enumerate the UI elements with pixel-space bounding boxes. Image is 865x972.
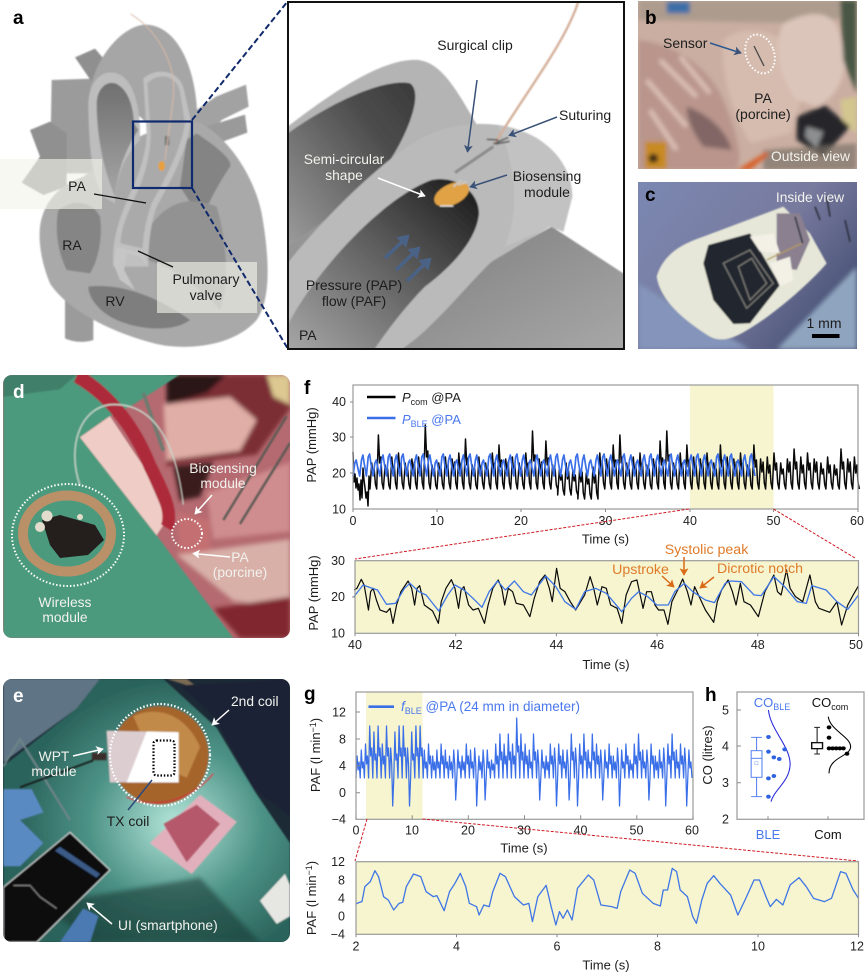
dotted outline xyxy=(12,484,124,586)
sensor line xyxy=(754,46,764,66)
label TX coil: TX coil xyxy=(107,813,149,829)
legend: @PA (24 mm in diameter) xyxy=(422,699,580,714)
label suturing: Suturing xyxy=(559,107,611,123)
panel letter f: f xyxy=(304,378,311,399)
y axis labels: 12 xyxy=(331,855,345,869)
x axis title: Time (s) xyxy=(582,657,630,672)
label PA porcine: (porcine) xyxy=(735,106,791,122)
BLE distribution xyxy=(751,710,790,802)
label CO com: CO xyxy=(812,695,831,710)
chart: PAF 0 to 60 s xyxy=(308,692,699,856)
chart: PAP 40 to 50 s xyxy=(306,542,863,672)
x axis labels xyxy=(348,638,863,652)
legend: commercial: @PA xyxy=(428,390,461,405)
zoom guide lines xyxy=(355,509,855,559)
y axis labels: 4 xyxy=(722,740,729,754)
annotation: upstroke: Upstroke xyxy=(612,562,669,578)
x axis labels: 2 xyxy=(353,940,360,954)
photo xyxy=(638,0,857,170)
x axis labels: 30 xyxy=(599,514,612,528)
blue trace xyxy=(356,868,859,925)
y axis labels: 0 xyxy=(339,786,346,800)
vessel rendering xyxy=(288,2,628,353)
x axis labels: 0 xyxy=(353,824,360,838)
panel e: surgical setup photo xyxy=(3,679,290,942)
label CO com: com xyxy=(831,702,848,712)
x axis labels xyxy=(353,940,864,954)
arrow to sensor xyxy=(710,43,741,53)
annotation: dicrotic notch xyxy=(700,561,803,588)
highlight band xyxy=(356,862,858,934)
label pressure and flow: Pressure (PAP) xyxy=(306,277,402,293)
label CO BLE: BLE xyxy=(773,702,790,712)
chart: PAF 2 to 12 s xyxy=(304,855,864,972)
label outside view: Outside view xyxy=(771,149,850,164)
arrow to biosensing module xyxy=(470,175,507,187)
x axis labels: 60 xyxy=(685,824,699,838)
components xyxy=(35,510,83,532)
commercial distribution xyxy=(812,717,851,773)
label inside view: Inside view xyxy=(776,190,844,205)
x axis title: Time (s) xyxy=(582,532,629,546)
panel letter g: g xyxy=(304,684,316,705)
legend: commercial: com xyxy=(411,397,428,407)
photo xyxy=(638,182,857,349)
y axis title: ) xyxy=(308,718,323,722)
y axis title: PAP (mmHg) xyxy=(306,555,321,631)
label biosensing module: module xyxy=(524,184,570,200)
annotation: systolic peak: Systolic peak xyxy=(665,542,749,558)
zoom box xyxy=(133,122,192,188)
plot frame xyxy=(353,385,858,509)
frame xyxy=(288,2,624,349)
panel letter c: c xyxy=(645,185,656,206)
panel letter a: a xyxy=(13,8,24,29)
arrow to WPT module xyxy=(73,749,103,756)
panel a: heart cross-section xyxy=(0,1,288,349)
label pulmonary valve: Pulmonary xyxy=(173,271,239,287)
x axis labels: 6 xyxy=(554,940,561,954)
blue trace xyxy=(353,454,755,476)
y axis labels: 30 xyxy=(331,554,345,568)
x axis labels: 8 xyxy=(654,940,661,954)
label wireless module: Wireless xyxy=(39,595,91,610)
panel b: outside view photo xyxy=(638,0,857,170)
label WPT module: module xyxy=(31,764,77,779)
y axis labels: 4 xyxy=(338,892,345,906)
y axis title: PAF (l min xyxy=(304,875,319,935)
label CO BLE: CO xyxy=(754,695,773,710)
label second coil: 2nd coil xyxy=(231,694,279,709)
y axis labels: 12 xyxy=(332,706,346,720)
y axis labels: 10 xyxy=(332,502,346,516)
arrow to second coil xyxy=(212,710,229,725)
y axis labels: −4 xyxy=(332,812,346,826)
leader: PA xyxy=(94,194,146,203)
x axis labels: 48 xyxy=(751,638,765,652)
legend: BLE xyxy=(405,706,422,716)
photo xyxy=(3,375,290,638)
x axis labels: 10 xyxy=(405,824,419,838)
panel g: flow charts xyxy=(304,684,864,972)
chart: PAP 0 to 60 s xyxy=(304,385,864,546)
axis ticks xyxy=(356,712,693,819)
line to TX coil xyxy=(128,780,152,810)
label semi-circular shape: Semi-circular xyxy=(304,152,384,167)
legend: commercial: P xyxy=(402,390,411,405)
label backdrop: PA xyxy=(0,159,102,209)
label sensor: Sensor xyxy=(663,35,708,51)
x axis labels xyxy=(353,824,699,838)
legend: f xyxy=(401,699,406,714)
plot frame xyxy=(356,862,858,934)
y axis labels: 30 xyxy=(332,430,346,444)
panel d: surgical photo xyxy=(3,375,290,638)
x axis labels: 40 xyxy=(683,514,697,528)
y axis title: ) xyxy=(304,861,319,865)
biosensing dotted circle xyxy=(172,519,202,548)
label scale: 1 mm xyxy=(806,315,842,331)
x axis labels: 50 xyxy=(630,824,643,838)
zoom guide lines xyxy=(355,819,858,861)
x axis labels: 46 xyxy=(650,638,664,652)
label PA porcine: (porcine) xyxy=(213,565,267,580)
x axis labels xyxy=(350,514,864,528)
frame background xyxy=(288,2,624,349)
panel letter e: e xyxy=(13,686,24,707)
x axis labels: 40 xyxy=(574,824,587,838)
x axis title: Time (s) xyxy=(500,840,548,856)
x axis labels: 0 xyxy=(350,514,357,528)
arrow to PA xyxy=(193,554,230,557)
arrow to suturing xyxy=(509,117,557,136)
axis ticks xyxy=(352,597,858,636)
photo xyxy=(3,679,290,942)
y axis labels: 20 xyxy=(331,590,345,604)
traces xyxy=(354,568,859,625)
panel letter h: h xyxy=(705,685,717,706)
label PA porcine: PA xyxy=(754,90,772,106)
highlight band xyxy=(366,692,422,819)
panel f: pressure charts xyxy=(304,378,864,672)
y axis labels xyxy=(331,855,345,942)
arrow to semi-circular shape xyxy=(378,178,425,196)
x axis labels: 10 xyxy=(751,940,765,954)
panel a: magnified pulmonary artery view xyxy=(288,2,628,353)
heart illustration xyxy=(22,14,268,347)
y axis labels: −4 xyxy=(331,928,345,942)
scale bar xyxy=(812,334,840,338)
label backdrop: pulmonary valve xyxy=(157,262,257,313)
arrow to surgical clip xyxy=(468,80,477,152)
legend: commercial xyxy=(367,390,461,407)
x axis labels: 60 xyxy=(850,514,864,528)
sensor dotted ellipse xyxy=(740,30,780,78)
axis ticks xyxy=(350,402,858,512)
label UI smartphone: UI (smartphone) xyxy=(118,918,218,933)
label WPT module: WPT xyxy=(39,749,69,764)
label semi-circular shape: shape xyxy=(325,168,363,183)
label biosensing module: module xyxy=(200,476,246,491)
plot frame xyxy=(355,561,858,633)
y axis title: PAF (l min xyxy=(308,732,323,792)
label PA porcine: PA xyxy=(231,550,249,565)
label biosensing module: Biosensing xyxy=(189,461,257,476)
x axis labels: 44 xyxy=(549,638,563,652)
arrow to biosensing xyxy=(195,495,212,514)
y axis title: −1 xyxy=(304,865,314,875)
circuit board xyxy=(42,515,104,558)
highlight band xyxy=(690,385,774,509)
legend: BLE: @PA xyxy=(428,412,461,427)
x axis labels: 12 xyxy=(850,940,864,954)
highlight band xyxy=(355,561,858,633)
black trace xyxy=(353,425,859,506)
label PA: PA xyxy=(299,327,317,343)
y axis labels: 10 xyxy=(331,626,345,640)
y axis title: −1 xyxy=(308,722,318,732)
legend: BLE: BLE xyxy=(411,419,428,429)
x axis labels: 20 xyxy=(461,824,475,838)
x axis labels: 30 xyxy=(517,824,531,838)
label surgical clip: Surgical clip xyxy=(437,37,513,53)
y axis labels xyxy=(332,395,346,516)
dotted coil outline xyxy=(110,704,210,806)
copper ring xyxy=(23,496,111,572)
y axis labels xyxy=(722,704,729,826)
y axis labels: 5 xyxy=(722,704,729,718)
label pressure and flow: flow (PAF) xyxy=(322,293,386,309)
x axis labels: 20 xyxy=(514,514,528,528)
category Com: Com xyxy=(814,827,842,842)
legend: BLE xyxy=(367,412,461,429)
wireless module xyxy=(12,484,124,586)
y axis labels: 4 xyxy=(339,759,346,773)
y axis labels: 8 xyxy=(339,732,346,746)
y axis labels: 40 xyxy=(332,395,346,409)
panel letter b: b xyxy=(645,8,657,29)
panel h: cardiac output distribution xyxy=(700,685,864,842)
zoom guide lines xyxy=(192,1,288,349)
y axis title: CO (litres) xyxy=(700,725,715,785)
arrow to smartphone xyxy=(87,903,112,924)
annotation: upstroke xyxy=(612,562,674,587)
y axis labels: 0 xyxy=(338,910,345,924)
panel c: inside view photo xyxy=(638,182,857,349)
x axis labels: 50 xyxy=(767,514,780,528)
x axis labels: 42 xyxy=(449,638,463,652)
axis ticks xyxy=(737,710,828,819)
y axis labels: 3 xyxy=(722,776,729,790)
plot frame xyxy=(737,692,864,819)
x axis labels: 50 xyxy=(849,638,863,652)
label PA: PA xyxy=(68,178,86,194)
legend: BLE: P xyxy=(402,412,411,427)
annotation: dicrotic notch: Dicrotic notch xyxy=(717,561,803,577)
y axis title: PAP (mmHg) xyxy=(304,407,319,483)
y axis labels: 2 xyxy=(722,812,729,826)
y axis labels: 20 xyxy=(332,466,346,480)
y axis labels xyxy=(331,554,345,640)
panel letter d: d xyxy=(13,382,25,403)
y axis labels xyxy=(332,706,346,826)
label wireless module: module xyxy=(42,610,88,625)
annotation: systolic peak xyxy=(665,542,749,575)
dotted TX coil outline xyxy=(154,740,174,776)
label biosensing module: Biosensing xyxy=(513,168,581,184)
y axis labels: 8 xyxy=(338,874,345,888)
x axis labels: 10 xyxy=(430,514,444,528)
x axis labels: 4 xyxy=(453,940,460,954)
label pulmonary valve: valve xyxy=(190,287,223,303)
x axis labels: 40 xyxy=(348,638,362,652)
axis ticks xyxy=(356,934,858,937)
legend xyxy=(368,699,580,716)
label RA: RA xyxy=(62,237,82,253)
category BLE: BLE xyxy=(756,827,781,842)
flow arrows xyxy=(385,236,430,281)
leader: pulmonary valve xyxy=(138,251,173,267)
blue trace xyxy=(356,718,692,806)
plot frame xyxy=(356,692,693,819)
label RV: RV xyxy=(105,293,125,309)
